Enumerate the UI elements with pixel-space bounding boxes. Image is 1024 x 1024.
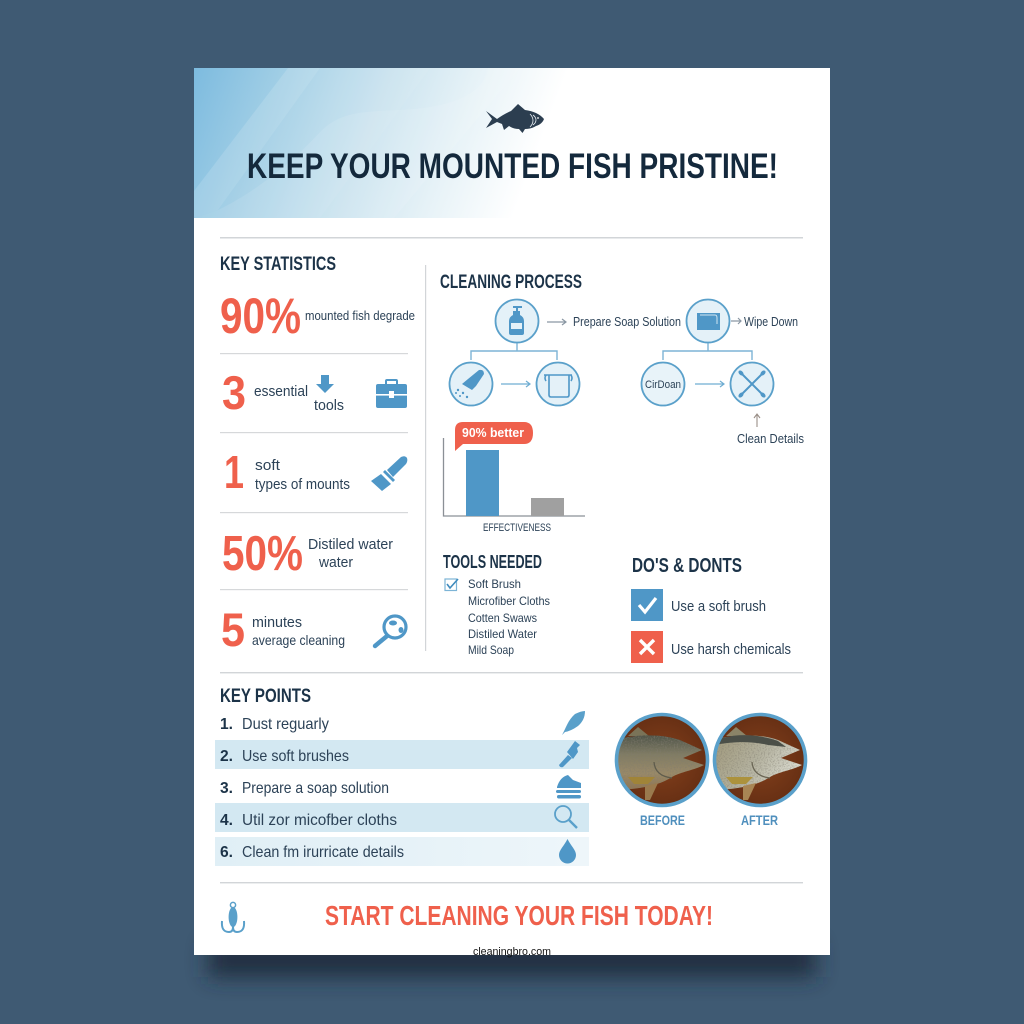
step: soap bottle [496, 300, 538, 342]
icon: feather [562, 711, 585, 735]
point 6: Clean fm irurricate details [242, 844, 404, 861]
label: wipe down: Wipe Down [744, 314, 798, 329]
stat: 50%: 50% [222, 527, 303, 581]
icon: briefcase [376, 379, 407, 408]
panel: tools needed [443, 552, 550, 657]
point 4: 4. [220, 812, 233, 829]
stat: 90%: mounted fish degrade [305, 308, 415, 323]
heading: key points: KEY POINTS [220, 686, 311, 707]
tools list [468, 577, 550, 657]
row band 2 [215, 740, 589, 769]
point 1: 1. [220, 716, 233, 733]
card drop shadow [208, 943, 816, 977]
bar: treated [466, 450, 499, 516]
title: KEEP YOUR MOUNTED FISH PRISTINE! [247, 147, 778, 186]
icon: water drop [559, 839, 576, 864]
step: brush [450, 362, 492, 406]
stat: 5 minutes [221, 603, 406, 656]
photo: before [610, 713, 709, 807]
stat: 1 soft [224, 446, 407, 498]
icon: fishing hook [222, 902, 244, 932]
point 3: Prepare a soap solution [242, 780, 389, 797]
tools list: Distiled Water [468, 627, 537, 641]
callout: 90% better: 90% better [462, 425, 524, 440]
icon: down arrow [316, 375, 334, 393]
icon: magnifier [555, 806, 577, 828]
do: soft brush [631, 589, 766, 621]
point 2: Use soft brushes [242, 748, 349, 765]
stat: 50% [222, 527, 393, 581]
icon: checkbox [445, 579, 458, 590]
point 3: 3. [220, 780, 233, 797]
panel: cleaning process [440, 272, 804, 446]
tools list: Soft Brush [468, 577, 521, 591]
arrow [547, 319, 566, 325]
arrow [731, 318, 741, 324]
step: text circle: CirDoan [645, 379, 681, 391]
tools list: Microfiber Cloths [468, 594, 550, 608]
label: clean details: Clean Details [737, 431, 804, 446]
stat: 3 essential tools: essential [254, 383, 308, 400]
arrow [695, 381, 724, 387]
label: prepare soap solution: Prepare Soap Solution [573, 314, 681, 329]
source credit: cleaningbro.com [473, 946, 551, 958]
arrow [501, 381, 530, 387]
stat: 50%: water [318, 554, 353, 571]
stat: 1 soft: 1 [224, 446, 244, 498]
dont: harsh chemicals: Use harsh chemicals [671, 641, 791, 658]
label: after: AFTER [741, 812, 778, 828]
stat: 3 essential tools: 3 [222, 366, 246, 419]
header banner [194, 68, 830, 218]
stat: 3 essential tools: tools [314, 397, 344, 414]
icon: fish [486, 104, 544, 133]
panel: before and after [610, 713, 807, 828]
bar: untreated [531, 498, 564, 516]
point 2: 2. [220, 748, 233, 765]
do: soft brush: Use a soft brush [671, 598, 766, 615]
row band 4 [215, 803, 589, 832]
tools list: Mild Soap [468, 643, 514, 657]
heading: dos and donts: DO'S & DONTS [632, 555, 742, 577]
icon: magnifier [375, 616, 406, 646]
panel: dos and donts [631, 555, 791, 663]
stat: 1 soft: soft [255, 457, 281, 474]
dont: harsh chemicals [631, 631, 791, 663]
panel: key points [215, 686, 589, 866]
photo: after [708, 713, 807, 807]
bar chart: effectiveness [444, 422, 585, 534]
heading: tools needed: TOOLS NEEDED [443, 552, 542, 572]
stat: 50%: Distiled water [308, 536, 393, 553]
label: before: BEFORE [640, 812, 685, 828]
stat: 3 essential tools [222, 366, 407, 419]
icon: brush [559, 741, 580, 767]
stat: 5 minutes: 5 [221, 603, 245, 656]
row band 6 [215, 837, 589, 866]
heading: cleaning process: CLEANING PROCESS [440, 272, 582, 293]
stat: 5 minutes: average cleaning [252, 632, 345, 648]
stat: 90% [220, 288, 415, 344]
divider below header [220, 237, 803, 238]
callout: 90% better [455, 422, 533, 451]
point 6: 6. [220, 844, 233, 861]
arrow [754, 414, 760, 427]
poster card [194, 68, 830, 955]
stat: 5 minutes: minutes [252, 614, 302, 631]
icon: paint brush [371, 456, 407, 491]
step: text circle [642, 362, 684, 406]
tools list: Cotten Swaws [468, 611, 537, 625]
axis label: EFFECTIVENESS [483, 522, 551, 534]
stat: 1 soft: types of mounts [255, 476, 350, 493]
heading: key statistics: KEY STATISTICS [220, 254, 336, 275]
icon: stacked cloths [556, 775, 581, 798]
point 1: Dust reguarly [242, 716, 329, 733]
panel: key statistics [220, 254, 415, 656]
stat: 90%: 90% [220, 288, 301, 344]
point 4: Util zor micofber cloths [242, 812, 397, 829]
step: cloth [686, 300, 730, 342]
step: towel [536, 362, 580, 406]
step: cotton swabs [730, 362, 774, 406]
call to action: START CLEANING YOUR FISH TODAY! [325, 900, 713, 931]
